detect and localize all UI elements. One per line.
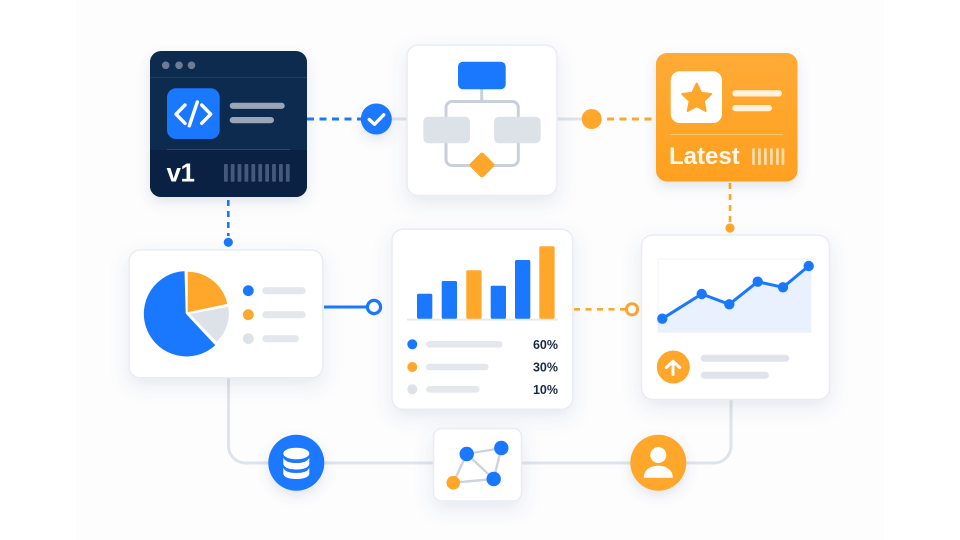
connector: grey line from flowchart to orange dot <box>556 118 584 120</box>
legend row: 10%: 10% <box>533 383 558 397</box>
panel: pie chart card <box>129 250 323 378</box>
panel: flowchart card <box>407 45 557 196</box>
panel: bar chart card <box>392 229 573 409</box>
connector: grey line from check to flowchart <box>390 118 408 120</box>
connector: dashed blue from v1 card to check <box>307 118 362 120</box>
line chart <box>657 259 814 332</box>
panel: line chart card <box>642 235 830 400</box>
version label: v1 <box>166 158 194 188</box>
flowchart decision diamond <box>469 152 495 178</box>
legend row: 60%: 60% <box>533 338 558 352</box>
connector: dashed orange to Latest card <box>607 118 656 120</box>
panel: network graph card <box>434 428 522 501</box>
window dots <box>162 62 195 69</box>
network nodes <box>446 441 508 490</box>
bar chart <box>407 246 558 321</box>
pie legend <box>243 285 306 344</box>
icon: blue check circle <box>361 104 392 134</box>
icon: orange dot <box>582 109 602 129</box>
icon: up arrow <box>657 350 690 384</box>
connector: dashed orange with ring <box>574 304 638 315</box>
text placeholder lines <box>701 355 789 379</box>
legend row: 60% <box>407 338 558 352</box>
icon: database circle <box>268 435 324 491</box>
network edges <box>453 448 501 483</box>
flowchart top node <box>458 62 506 89</box>
connector: blue line with ring <box>324 300 381 314</box>
flowchart left node <box>423 117 470 143</box>
legend row: 30%: 30% <box>533 360 558 374</box>
panel: orange Latest card <box>656 53 798 182</box>
barcode ticks <box>752 148 784 165</box>
icon: user circle <box>630 435 686 491</box>
icon: code brackets <box>167 88 220 139</box>
text placeholder lines <box>230 103 285 123</box>
connector: dashed blue from v1 card to pie card <box>224 200 233 247</box>
legend row: 10% <box>407 383 558 397</box>
barcode ticks <box>224 164 290 182</box>
version label: Latest <box>669 143 740 170</box>
connector: bottom left grey elbow <box>228 376 436 463</box>
flowchart connectors <box>446 89 518 166</box>
pie chart <box>144 271 229 356</box>
connector: dashed orange from Latest card to line chart card <box>725 183 735 233</box>
flowchart right node <box>494 117 541 143</box>
legend row: 30% <box>407 360 558 374</box>
text placeholder lines <box>732 90 782 111</box>
connector: bottom right grey elbow <box>519 398 731 463</box>
panel: dark v1 code card <box>150 51 307 197</box>
icon: star <box>671 71 722 123</box>
